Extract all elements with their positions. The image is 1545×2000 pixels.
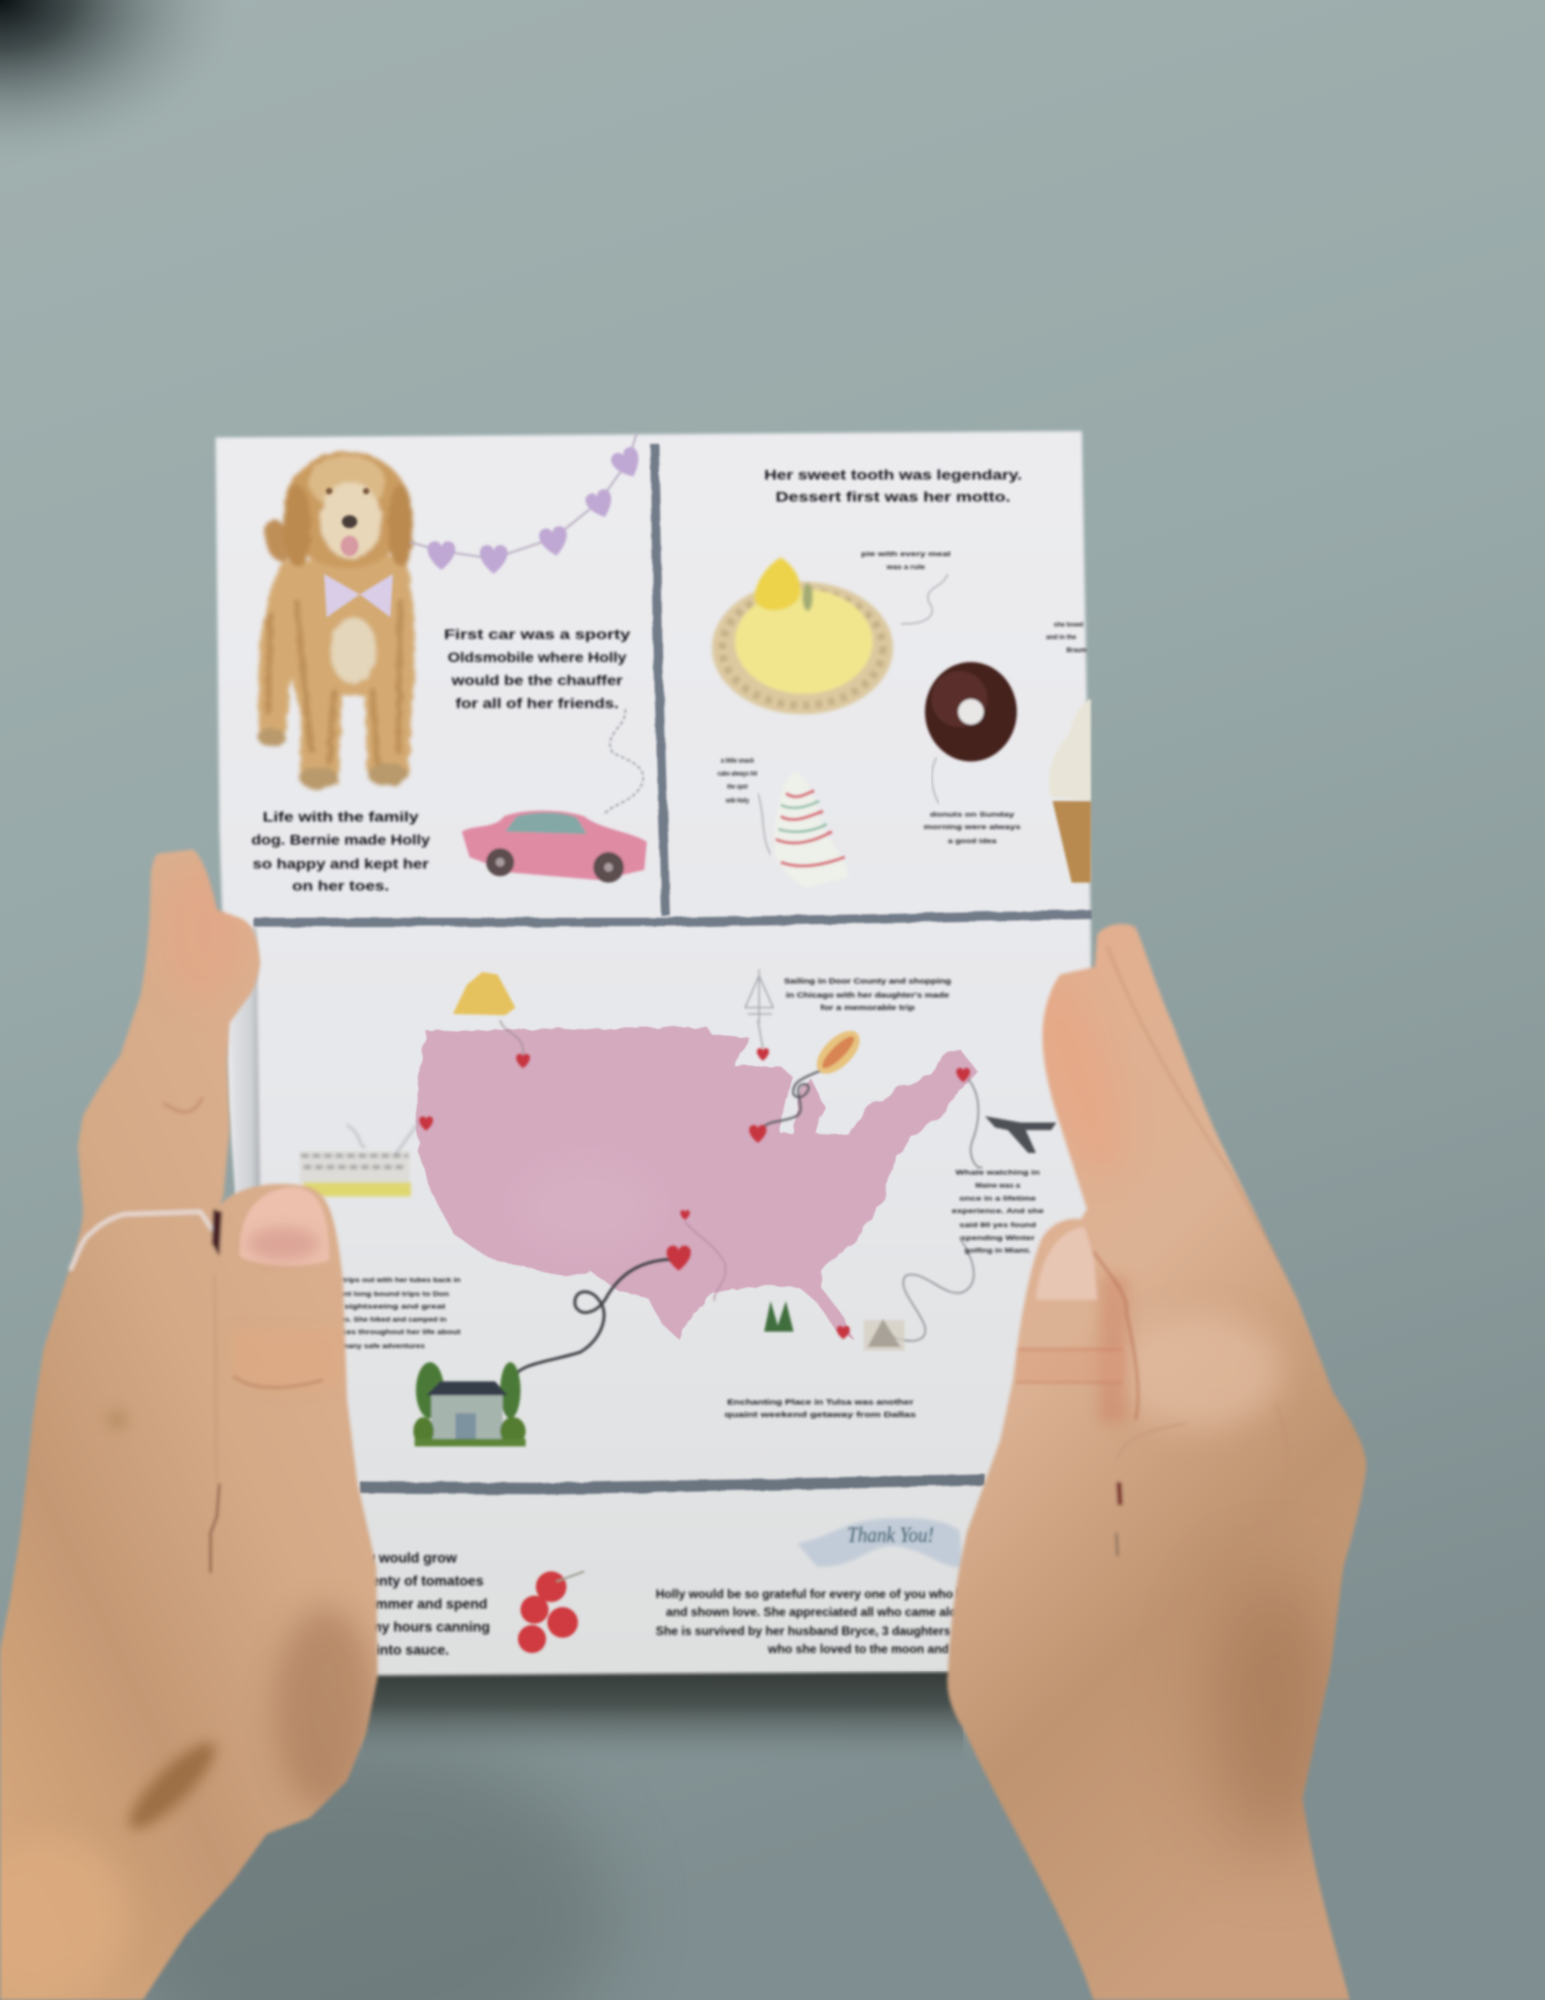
map highlight — [517, 1161, 657, 1250]
spine gutter — [227, 927, 262, 1288]
caption: pie: pie with every meal — [861, 551, 951, 558]
text: road trips: times. She hiked and camped in — [329, 1316, 447, 1323]
text: first car: First car was a sporty — [444, 626, 630, 642]
book page — [216, 431, 1095, 1676]
lower hand shading — [1212, 1575, 1340, 1856]
arrow: donut note — [932, 758, 939, 804]
fingertip warmth — [159, 861, 249, 1001]
script: thank you: Thank You! — [847, 1523, 934, 1547]
hand shape — [931, 918, 1378, 2000]
illustration: heart bunting — [410, 434, 646, 574]
text: whale watching: experience. And she — [952, 1208, 1044, 1215]
illustration: chocolate donut — [925, 662, 1017, 761]
text: road trips: for sightseeing and great — [328, 1304, 447, 1311]
heading: sweet tooth: Her sweet tooth was legendary. — [764, 467, 1022, 483]
illustration: christmas tree cake — [774, 772, 848, 888]
text: Door County: for a memorable trip — [820, 1003, 915, 1012]
illustration: pink car — [462, 811, 647, 883]
text: Enchanting Place: Enchanting Place in Tulsa was another — [727, 1397, 913, 1406]
thumb nail — [1036, 1227, 1097, 1300]
caption: donuts: a good idea — [948, 838, 997, 845]
arrow: cake note — [758, 793, 771, 855]
caption: ice cream — [1046, 621, 1087, 654]
text: Door County — [784, 976, 952, 1012]
text: family dog: dog. Bernie made Holly — [251, 831, 430, 847]
text: Door County: Sailing in Door County and shopping — [784, 976, 952, 985]
thumb web gap — [1119, 1482, 1120, 1505]
icon: airplane — [985, 1116, 1056, 1153]
caption: donuts — [924, 811, 1021, 845]
finger fold — [163, 1097, 203, 1112]
silver ring — [70, 1212, 213, 1270]
text: whale watching: Whale watching in — [956, 1170, 1040, 1177]
hand fold crease — [119, 1733, 225, 1839]
icon: beach scene — [864, 1319, 905, 1351]
lilac bow — [324, 574, 393, 617]
text: Enchanting Place — [725, 1397, 916, 1419]
finger gap — [211, 1483, 219, 1573]
palm edge shading — [274, 1607, 376, 1811]
caption: snack cake: cake always hit — [718, 771, 758, 778]
thumb web line — [1116, 1533, 1118, 1556]
finger gap soft — [214, 1276, 217, 1480]
thumb nail — [240, 1187, 329, 1266]
text: tomatoes: plenty of tomatoes — [359, 1572, 484, 1588]
icon: cable car trolley — [300, 1122, 418, 1196]
thumb knuckle band — [230, 1329, 344, 1393]
arrow: text to car — [605, 709, 643, 814]
text: first car: Oldsmobile where Holly — [448, 649, 627, 665]
hand shape — [0, 842, 383, 2000]
text: tomatoes — [339, 1550, 490, 1657]
caption: pie: was a rule — [885, 564, 926, 571]
text: whale watching: golfing in Miami. — [965, 1248, 1031, 1255]
location hearts — [419, 1048, 970, 1339]
panel: tomatoes and thank you — [339, 1518, 983, 1657]
text: tomatoes: Holly would grow — [341, 1550, 457, 1565]
text: whale watching — [952, 1170, 1044, 1255]
thumb knuckle band — [1018, 1351, 1078, 1380]
text: road trips: Spent long bound trips to Don — [328, 1291, 449, 1298]
panel dividers — [254, 444, 1092, 1489]
text: road trips: places throughout her life about — [329, 1329, 462, 1336]
text: family dog — [251, 808, 430, 893]
icon: cheese — [453, 972, 515, 1015]
text: road trips: Road trips out with her tubes back in — [320, 1277, 461, 1284]
text: tomatoes: all summer and spend — [339, 1595, 487, 1611]
thumb crease — [233, 1376, 323, 1388]
route lines — [500, 1020, 982, 1380]
text: thank you message: who she loved to the moon and back. — [767, 1642, 983, 1656]
text: thank you message: She is survived by her husband Bryce, 3 daughters — [656, 1624, 951, 1638]
heading: sweet tooth: Dessert first was her motto. — [776, 488, 1010, 504]
dog face — [324, 488, 393, 617]
left hand — [0, 842, 383, 2000]
heading: sweet tooth — [764, 467, 1022, 504]
palm fold — [1180, 1424, 1183, 1425]
text: family dog: on her toes. — [292, 877, 389, 893]
thumb and finger boundary — [1093, 1251, 1138, 1420]
illustration: ice cream cone — [1049, 699, 1091, 883]
caption: snack cake: with Holly — [725, 797, 749, 804]
text: tomatoes: many hours canning — [353, 1618, 490, 1634]
text: thank you message — [656, 1587, 983, 1656]
icon: cherry tomatoes — [518, 1571, 584, 1653]
text: family dog: Life with the family — [263, 808, 419, 824]
knuckle dimple — [107, 1409, 128, 1430]
panel: desserts — [712, 467, 1091, 888]
caption: ice cream: she loved — [1054, 621, 1083, 628]
brush swash behind thank you — [797, 1518, 963, 1567]
text: whale watching: said 80 yes found — [959, 1222, 1036, 1229]
arrow: pie note — [901, 574, 948, 624]
caption: donuts: morning were always — [924, 824, 1021, 831]
illustration: family dog Bernie — [258, 452, 414, 790]
illustration: lemon pie — [712, 557, 893, 714]
caption: pie — [861, 551, 951, 571]
text: Door County: in Chicago with her daughter's made — [786, 990, 949, 999]
text: road trips: so many safe adventures — [329, 1343, 425, 1350]
text: thank you message: and shown love. She appreciated all who came along. — [666, 1605, 975, 1619]
text: first car: would be the chauffer — [450, 672, 623, 688]
caption: donuts: donuts on Sunday — [930, 811, 1015, 818]
panel: dog and car — [251, 434, 647, 893]
text: first car — [444, 626, 630, 711]
book — [216, 431, 1095, 1676]
nail base pink — [248, 1227, 319, 1260]
text: road trips — [320, 1277, 462, 1350]
map of the United States — [416, 1027, 977, 1339]
finger crease — [1108, 948, 1264, 1236]
text: tomatoes: into sauce. — [376, 1641, 449, 1657]
caption: snack cake: a little snack — [721, 758, 754, 765]
icon: sailboat — [745, 969, 773, 1023]
caption: snack cake: the spot — [727, 783, 748, 790]
wrist bone fold — [1263, 1403, 1287, 1531]
text: whale watching: spending Winter — [961, 1235, 1035, 1242]
text: Enchanting Place: quaint weekend getaway from Dallas — [725, 1410, 916, 1419]
right hand — [931, 918, 1378, 2000]
caption: ice cream: Braum — [1067, 647, 1087, 654]
caption: ice cream: and in the — [1046, 634, 1077, 641]
pale forearm — [0, 1837, 128, 1990]
thumb side warm band — [1100, 1276, 1128, 1422]
text: whale watching: Maine was a — [975, 1183, 1021, 1189]
palm light — [1116, 1314, 1282, 1429]
thumb creases — [1016, 1349, 1123, 1383]
text: whale watching: once in a lifetime — [959, 1195, 1037, 1202]
text: thank you message: Holly would be so grateful for every one of you who has — [656, 1587, 978, 1601]
icon: small pine trees — [764, 1301, 794, 1332]
ring shadow — [212, 1209, 222, 1256]
dog body and head — [258, 452, 414, 790]
text: first car: for all of her friends. — [455, 695, 619, 711]
icon: hot dog — [809, 1023, 867, 1081]
panel: USA travel map — [300, 969, 1056, 1446]
finger tip warmth — [1052, 1022, 1106, 1144]
text: family dog: so happy and kept her — [253, 856, 429, 872]
icon: house with trees — [413, 1362, 526, 1446]
caption: snack cake — [718, 758, 758, 804]
